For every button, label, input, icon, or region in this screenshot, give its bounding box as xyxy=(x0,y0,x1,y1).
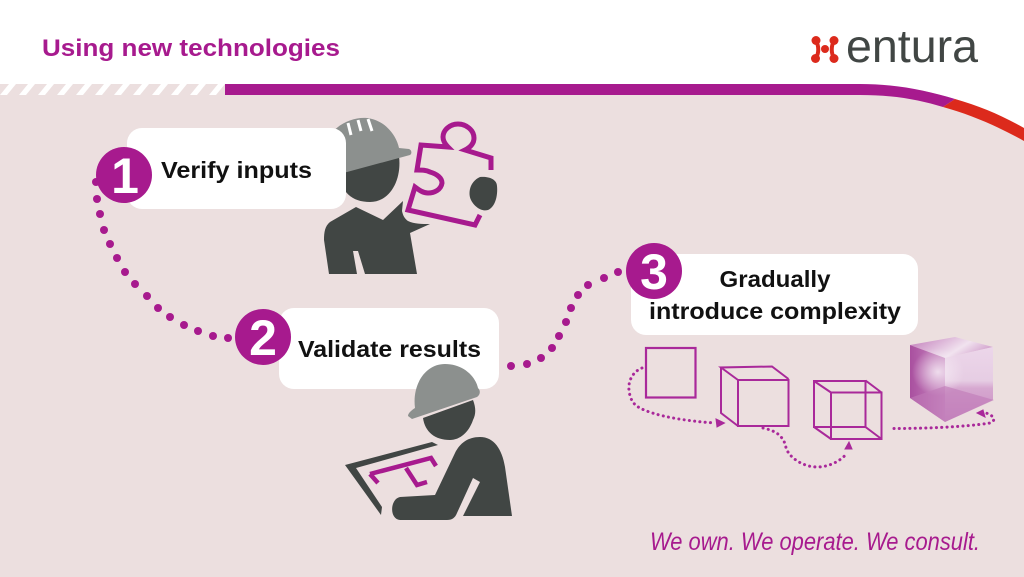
solid wireframe cube xyxy=(721,366,788,426)
dotted path 1 to 2 xyxy=(92,178,232,342)
head xyxy=(340,156,399,202)
plan outline xyxy=(345,442,438,515)
dotted arrow a xyxy=(629,368,724,427)
dotted arrow b xyxy=(763,428,852,467)
transparent wireframe cube xyxy=(814,380,882,439)
step 3 label xyxy=(649,266,901,324)
plan drawing xyxy=(370,458,436,485)
step 3 number: 3 xyxy=(640,244,668,300)
step 3 number xyxy=(626,243,682,300)
icon: entura mark xyxy=(811,36,838,63)
step 2 number: 2 xyxy=(249,310,277,366)
hand xyxy=(470,177,497,210)
puzzle piece xyxy=(408,124,491,225)
step 3 label: Gradually xyxy=(720,266,831,292)
head xyxy=(423,400,475,440)
tagline: We own. We operate. We consult. xyxy=(650,528,980,556)
callout 3 bubble xyxy=(631,254,918,335)
step 3 label: introduce complexity xyxy=(649,298,901,324)
step 1 number: 1 xyxy=(111,148,139,204)
step 1 label: Verify inputs xyxy=(161,157,312,183)
square xyxy=(646,348,696,398)
dotted path 2 to 3 xyxy=(507,268,622,370)
cube progression xyxy=(629,337,994,467)
helmet xyxy=(330,118,411,176)
red band xyxy=(943,99,1024,141)
body xyxy=(392,437,512,520)
dotted arrow c xyxy=(894,410,994,428)
helmet xyxy=(408,364,480,419)
striped band xyxy=(0,84,225,95)
callout 2 bubble xyxy=(279,308,499,389)
purple band xyxy=(225,84,955,107)
step 1 number xyxy=(96,147,152,204)
step 2 label: Validate results xyxy=(298,336,481,362)
shaded crystal cube xyxy=(910,337,994,422)
body xyxy=(324,201,430,274)
step 2 number xyxy=(235,309,291,366)
logo: entura xyxy=(811,20,978,72)
worker 2 with plans xyxy=(345,364,512,520)
worker 1 with puzzle xyxy=(324,118,497,274)
header white area xyxy=(0,0,1024,128)
callout 1 bubble xyxy=(127,128,346,209)
logo wordmark: entura xyxy=(846,20,978,72)
title: Using new technologies xyxy=(42,35,340,62)
helmet stripes xyxy=(348,119,372,135)
